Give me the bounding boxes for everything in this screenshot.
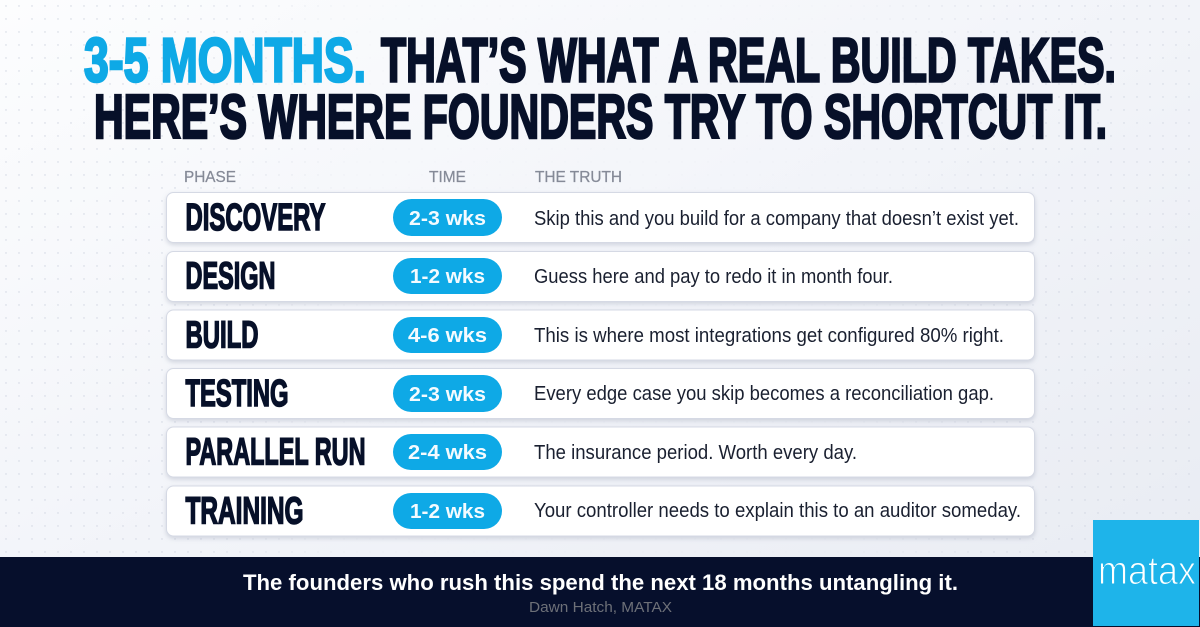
row: discovery: Skip this and you build for a company that doesn’t exist yet. [534, 208, 1019, 230]
row: training: 1-2 wks [410, 501, 485, 523]
row: design [166, 252, 1034, 302]
row: discovery: DISCOVERY [186, 197, 326, 239]
row: build: 4-6 wks [408, 325, 487, 347]
row: training: TRAINING [186, 490, 304, 532]
row: design: DESIGN [186, 256, 276, 298]
row: testing: TESTING [186, 373, 288, 415]
table column headers: TIME [429, 169, 466, 186]
footer quote: The founders who rush this spend the next 18 months untangling it. [243, 570, 958, 595]
table column headers: PHASE [184, 169, 236, 186]
row: design: 1-2 wks [410, 266, 485, 288]
row: build: BUILD [186, 314, 258, 356]
row: parallel run [166, 427, 1034, 477]
row: parallel run: The insurance period. Worth every day. [534, 442, 857, 464]
row: build: This is where most integrations get configured 80% right. [534, 325, 1004, 347]
row: testing [166, 368, 1034, 418]
row: discovery: 2-3 wks [409, 208, 486, 230]
table column headers: THE TRUTH [535, 169, 622, 186]
footer banner [0, 557, 1200, 627]
row: testing: Every edge case you skip becomes a reconciliation gap. [534, 383, 994, 405]
table column headers [184, 169, 622, 186]
row: training: Your controller needs to explain this to an auditor someday. [534, 500, 1021, 522]
attribution: Dawn Hatch, MATAX [529, 600, 672, 616]
title [84, 26, 1116, 152]
row: training [166, 486, 1034, 536]
title: 3-5 MONTHS. [84, 26, 366, 96]
row: parallel run: PARALLEL RUN [186, 432, 366, 474]
row: discovery [166, 192, 1034, 242]
logo: matax [1093, 520, 1199, 626]
row: parallel run: 2-4 wks [408, 442, 487, 464]
row: build [166, 310, 1034, 360]
row: testing: 2-3 wks [409, 384, 486, 406]
row: design: Guess here and pay to redo it in month four. [534, 266, 893, 288]
